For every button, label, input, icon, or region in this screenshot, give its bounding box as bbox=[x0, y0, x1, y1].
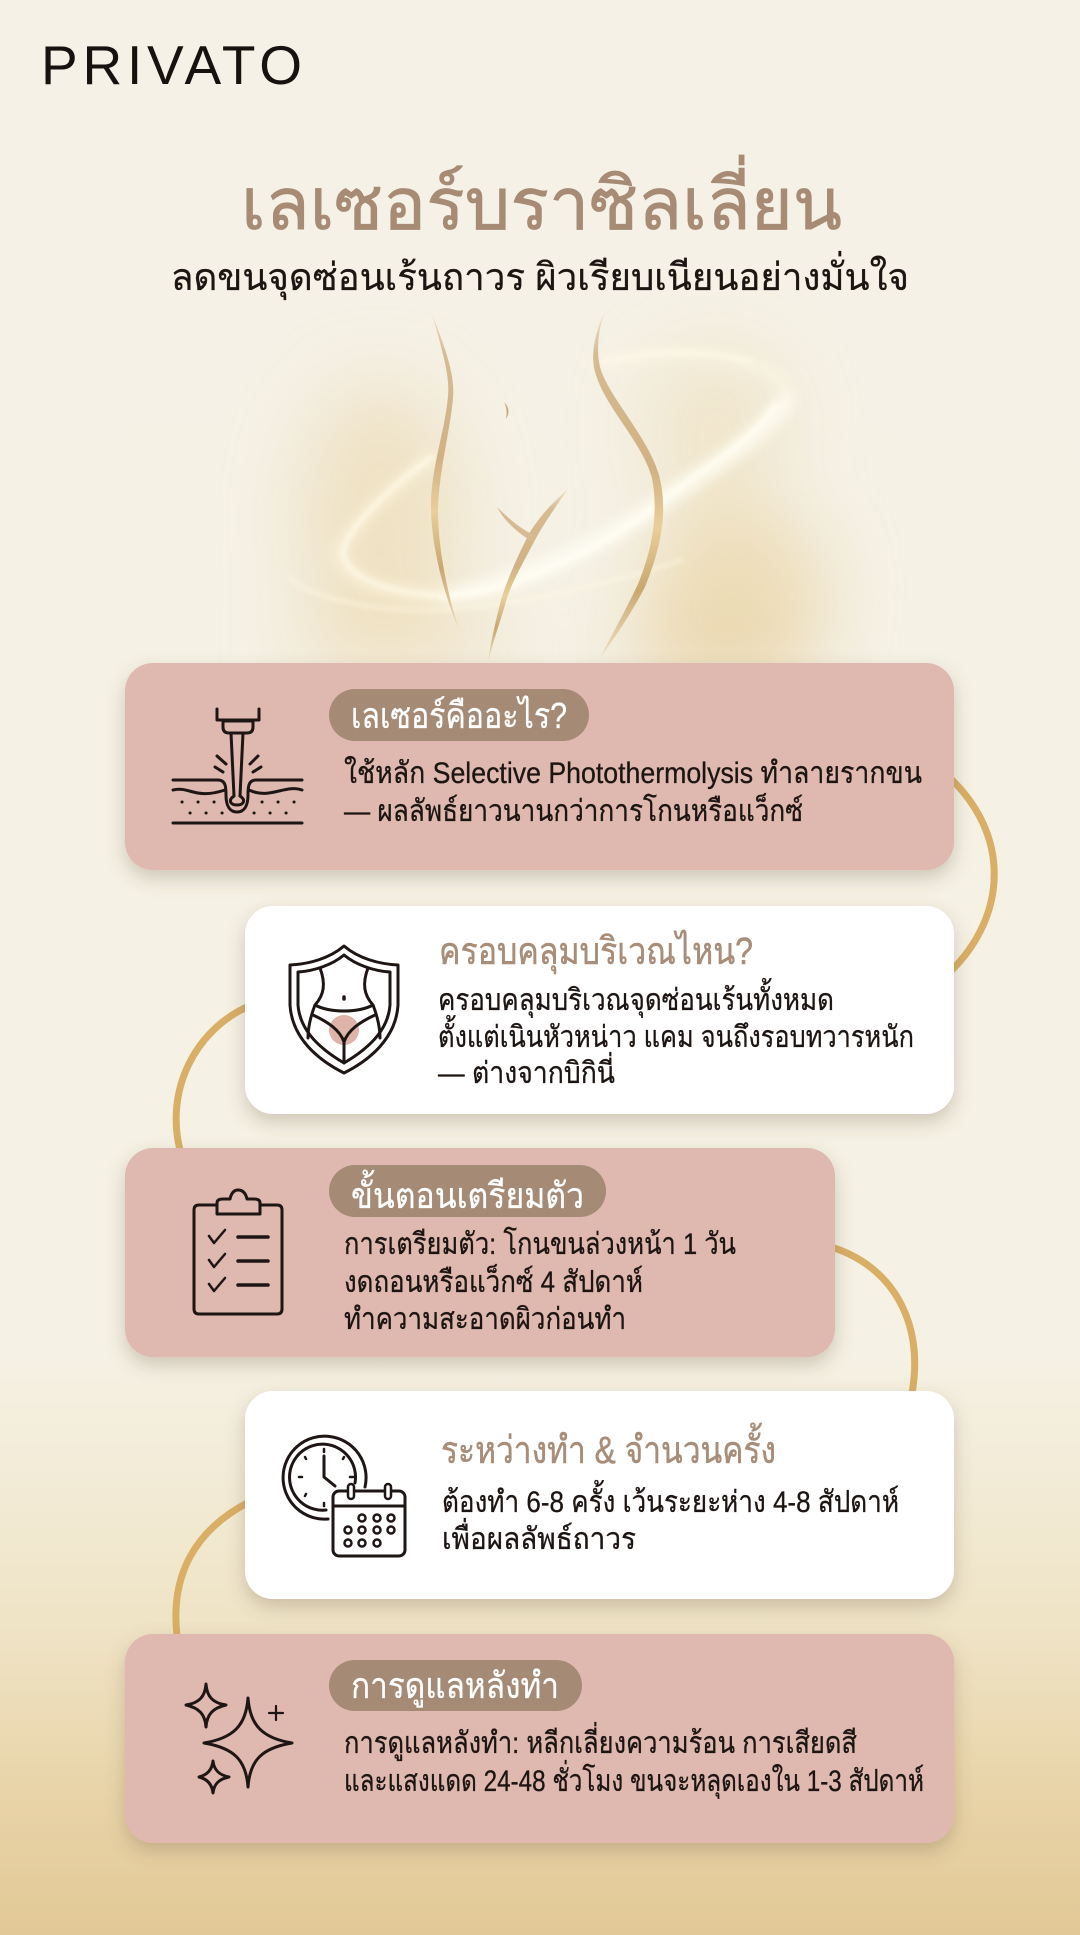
pill heading bbox=[329, 689, 589, 741]
body text: เพื่อผลลัพธ์ถาวร bbox=[442, 1518, 636, 1556]
body text: — ต่างจากบิกินี่ bbox=[438, 1052, 615, 1090]
panel: during treatment bbox=[245, 1391, 954, 1599]
body text bbox=[344, 1722, 924, 1800]
body text: การดูแลหลังทำ: หลีกเลี่ยงความร้อน การเสียดสี bbox=[344, 1722, 857, 1761]
icon: clipboard checklist bbox=[194, 1190, 282, 1314]
body text: ใช้หลัก Selective Photothermolysis ทำลายรากขน bbox=[344, 756, 922, 790]
body text: ตั้งแต่เนินหัวหน่าว แคม จนถึงรอบทวารหนัก bbox=[438, 1015, 914, 1054]
panel: preparation bbox=[125, 1148, 835, 1357]
body text: การเตรียมตัว: โกนขนล่วงหน้า 1 วัน bbox=[344, 1226, 736, 1261]
pill heading: ขั้นตอนเตรียมตัว bbox=[351, 1169, 584, 1216]
panel: aftercare bbox=[125, 1634, 954, 1843]
body text: และแสงแดด 24-48 ชั่วโมง ขนจะหลุดเองใน 1-3 สัปดาห์ bbox=[344, 1760, 924, 1800]
navel bbox=[504, 402, 508, 419]
body text: ต้องทำ 6-8 ครั้ง เว้นระยะห่าง 4-8 สัปดาห์ bbox=[442, 1480, 899, 1519]
pill heading: การดูแลหลังทำ bbox=[351, 1665, 559, 1708]
logo: PRIVATO bbox=[41, 34, 302, 96]
inner thigh line bbox=[488, 489, 568, 662]
pill heading: เลเซอร์คืออะไร? bbox=[351, 695, 567, 736]
body text bbox=[344, 1226, 736, 1336]
light swirls bbox=[339, 354, 788, 595]
body outline right bbox=[593, 313, 663, 658]
icon: clock and calendar bbox=[283, 1436, 405, 1556]
panel: coverage bbox=[245, 906, 954, 1114]
connector arcs bbox=[176, 778, 994, 1636]
body text: ครอบคลุมบริเวณจุดซ่อนเร้นทั้งหมด bbox=[438, 978, 834, 1019]
bikini crease line bbox=[497, 507, 536, 542]
body outline left bbox=[431, 314, 460, 632]
title: เลเซอร์บราซิลเลี่ยน bbox=[241, 155, 842, 245]
body text bbox=[344, 756, 922, 828]
body text bbox=[442, 1480, 899, 1556]
body text: — ผลลัพธ์ยาวนานกว่าการโกนหรือแว็กซ์ bbox=[344, 792, 803, 828]
hero: glowing body line art bbox=[290, 313, 825, 677]
icon: sparkles bbox=[186, 1684, 292, 1793]
body text: ทำความสะอาดผิวก่อนทำ bbox=[344, 1303, 626, 1336]
heading: ระหว่างทำ & จำนวนครั้ง bbox=[441, 1422, 776, 1472]
body text: งดถอนหรือแว็กซ์ 4 สัปดาห์ bbox=[344, 1263, 643, 1299]
icon: laser on hair follicle bbox=[173, 709, 302, 823]
heading: ครอบคลุมบริเวณไหน? bbox=[439, 930, 753, 974]
panel: what is laser bbox=[125, 663, 954, 870]
subtitle: ลดขนจุดซ่อนเร้นถาวร ผิวเรียบเนียนอย่างมั่นใจ bbox=[171, 251, 909, 300]
icon: shield with body bbox=[290, 946, 398, 1073]
body text bbox=[438, 978, 914, 1090]
glow blobs bbox=[290, 350, 825, 677]
